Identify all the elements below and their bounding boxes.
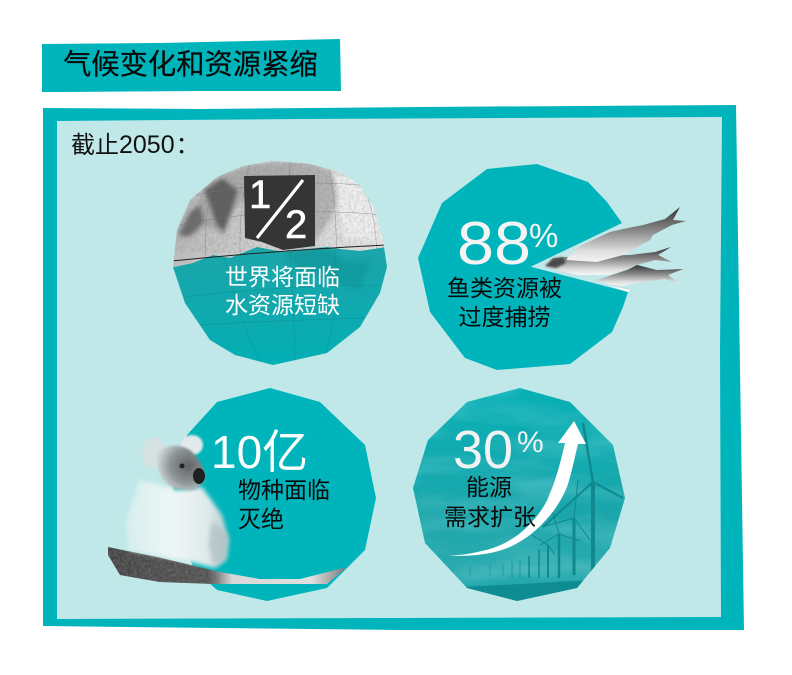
- subtitle: 截止2050：: [71, 131, 200, 159]
- globe grid: [178, 161, 385, 366]
- fraction 1/2: 1: [249, 173, 271, 217]
- value 88%: [457, 210, 558, 277]
- equator: [172, 245, 386, 261]
- icon: fish: [545, 207, 686, 292]
- value 88%: %: [529, 217, 558, 254]
- title text: 气候变化和资源紧缩: [63, 48, 318, 80]
- title banner: [42, 39, 341, 92]
- globe image: [170, 158, 392, 370]
- panel: water globe: [170, 158, 392, 370]
- panel: wind energy: [410, 385, 630, 605]
- koala label: 物种面临: [238, 477, 330, 503]
- koala label: 灭绝: [238, 506, 284, 532]
- energy label: 能源: [466, 474, 512, 500]
- fraction 1/2: [249, 173, 307, 247]
- value 10亿: 10亿: [211, 426, 308, 478]
- globe label: 世界将面临: [225, 264, 340, 290]
- dark fraction box: [244, 175, 315, 250]
- fish label: 过度捕捞: [458, 304, 550, 330]
- value 30%: [453, 420, 544, 480]
- panel: koala: [108, 388, 376, 601]
- icon: continents: [178, 160, 382, 245]
- fish label: 鱼类资源被: [447, 275, 562, 301]
- value 30%: 30: [453, 420, 513, 480]
- icon: branch: [108, 547, 347, 584]
- icon: koala: [126, 435, 229, 568]
- water: [170, 246, 392, 370]
- value 88%: 88: [457, 210, 531, 277]
- globe label: 水资源短缺: [225, 292, 340, 318]
- panel: fish: [418, 164, 686, 370]
- icon: wind turbines: [410, 385, 630, 605]
- arrow: [448, 421, 586, 556]
- panel: frame: [43, 105, 744, 630]
- energy label: 需求扩张: [444, 504, 536, 530]
- fraction 1/2: 2: [285, 203, 307, 247]
- value 30%: %: [517, 426, 544, 459]
